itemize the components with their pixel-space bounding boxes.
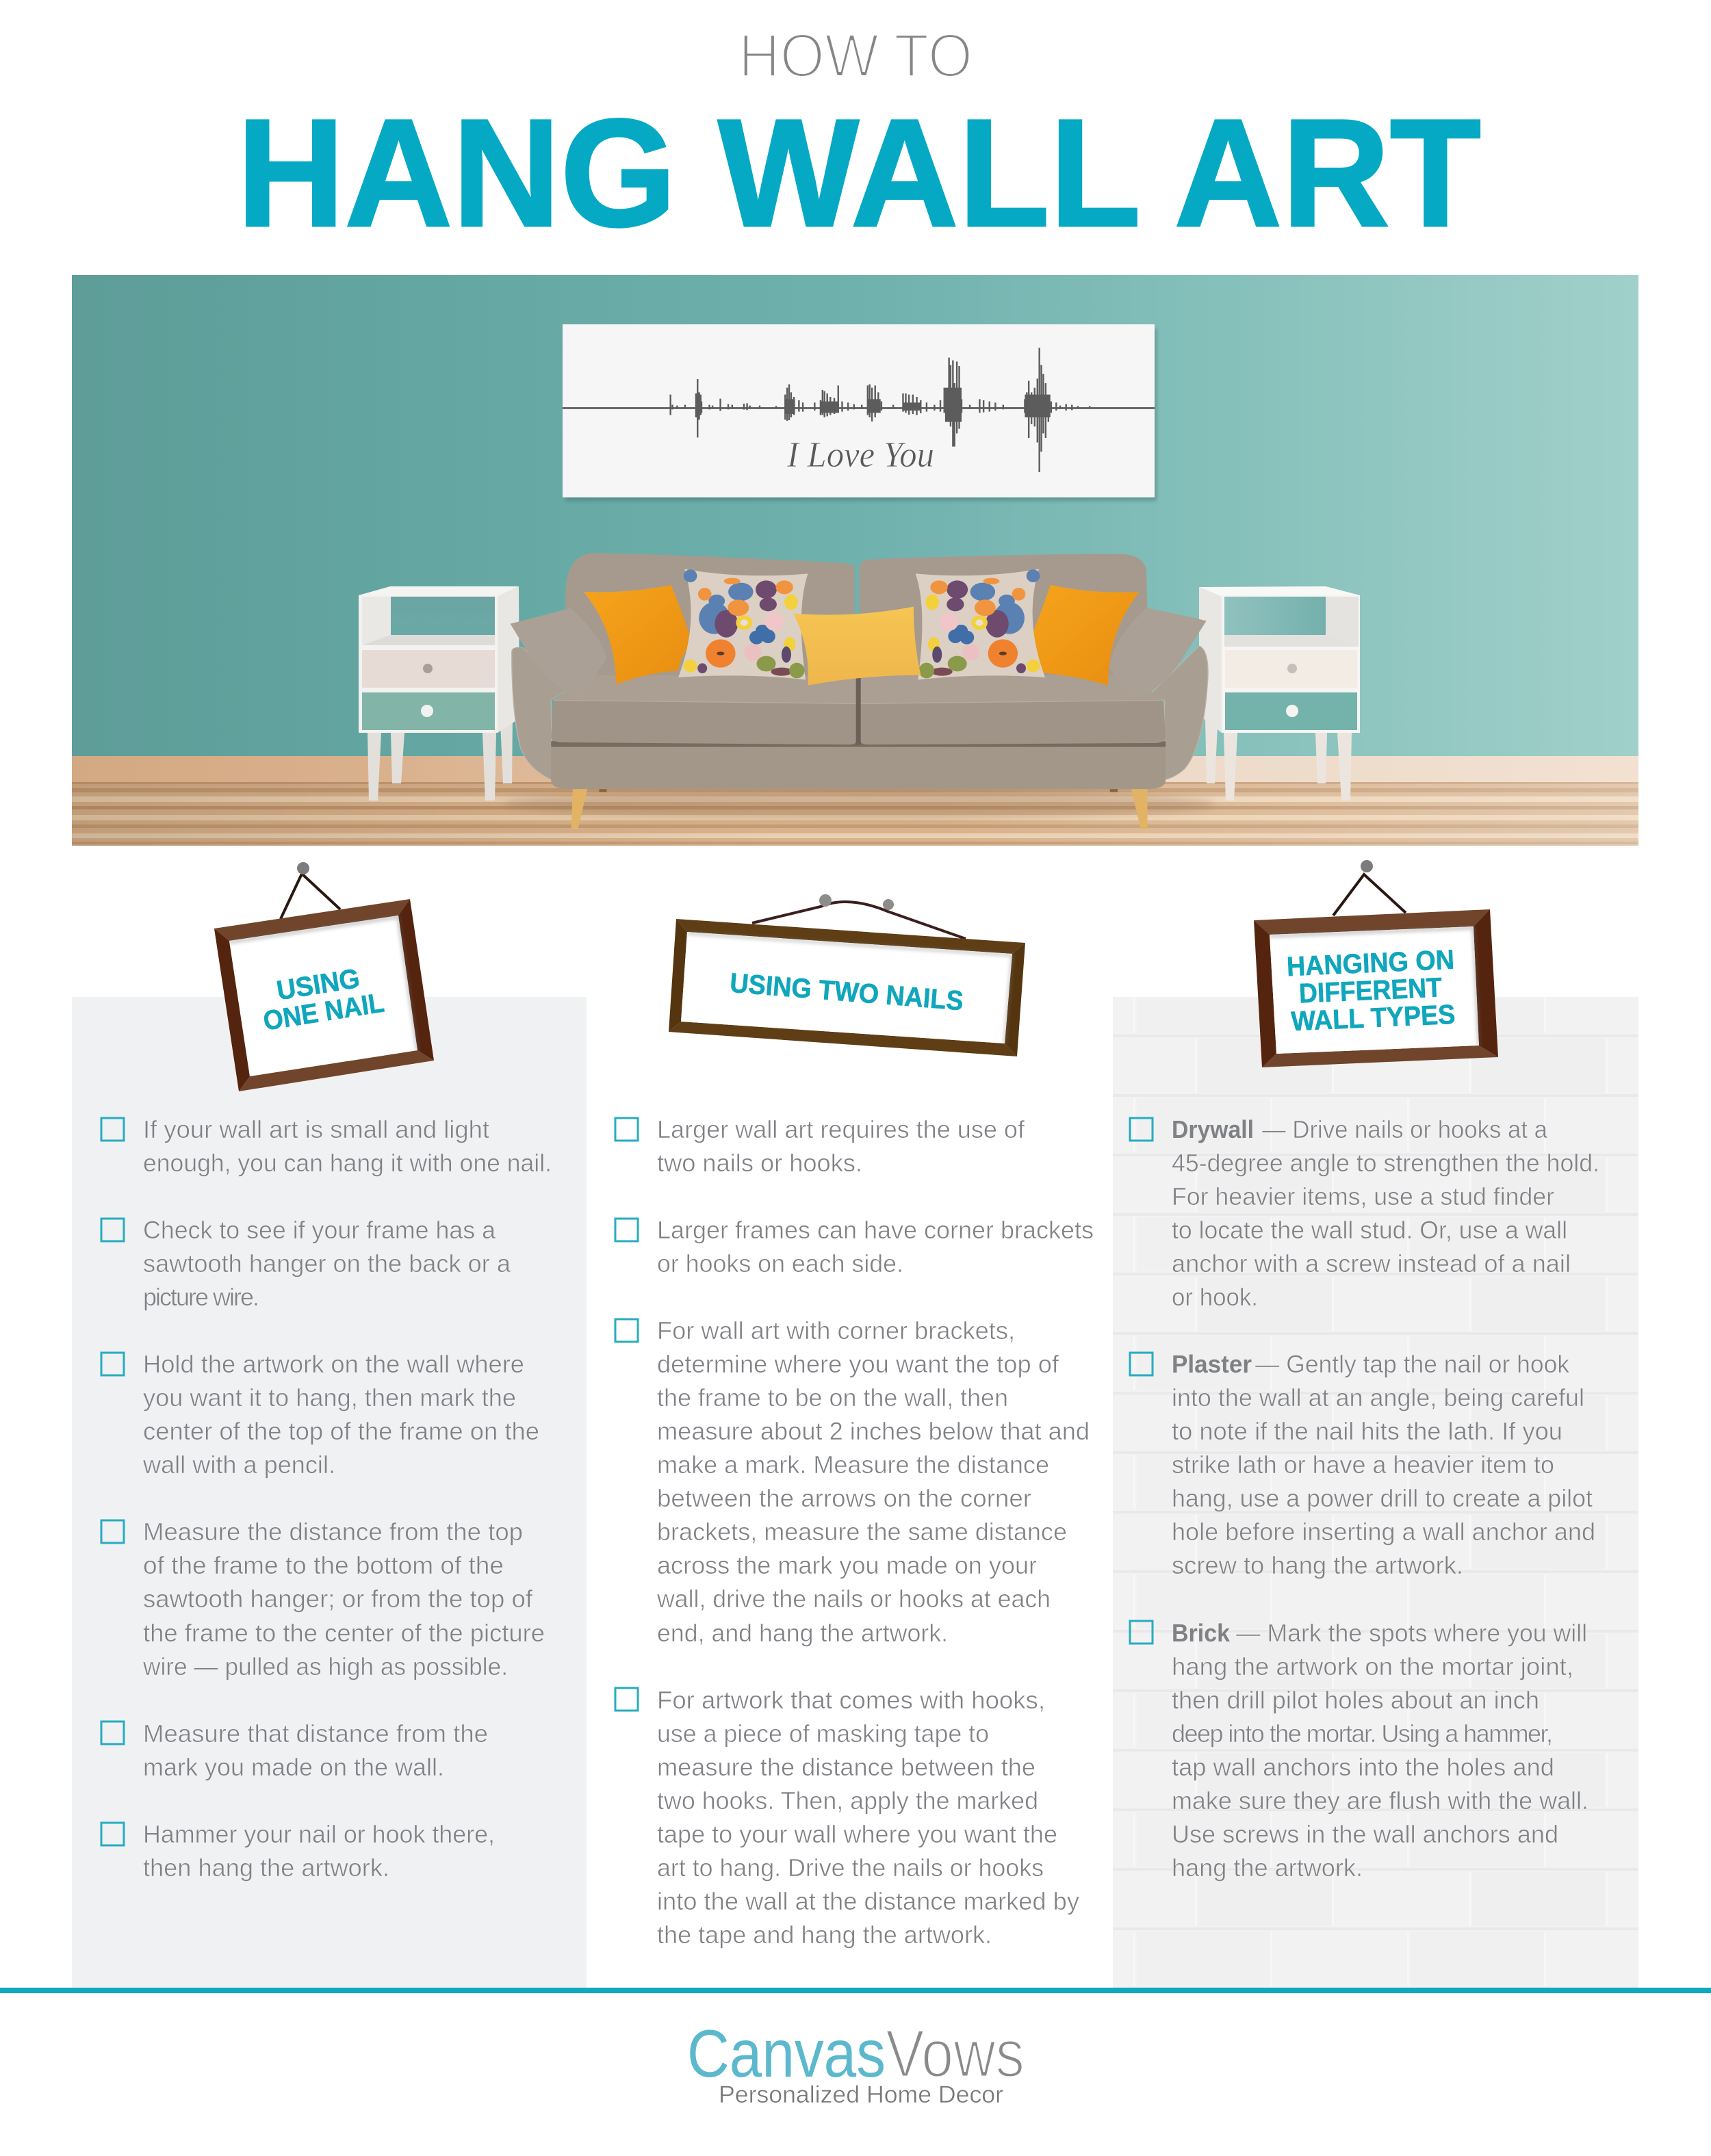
item: corner brackets xyxy=(615,1316,1090,1647)
item: plaster: strike lath or have a heavier item to xyxy=(1172,1451,1554,1479)
column three brick panel xyxy=(1113,997,1638,1988)
item: drywall: to locate the wall stud. Or, use a wall xyxy=(1172,1216,1567,1244)
item: artwork with hooks: into the wall at the distance marked by xyxy=(657,1887,1079,1915)
item: corner brackets: the frame to be on the wall, then xyxy=(657,1384,1008,1412)
item: small and light: enough, you can hang it with one nail. xyxy=(143,1149,552,1177)
item: drywall xyxy=(1130,1115,1599,1311)
item: corner brackets: across the mark you made on your xyxy=(657,1551,1037,1579)
item: corner brackets: wall, drive the nails or hooks at each xyxy=(656,1585,1051,1613)
item: plaster: screw to hang the artwork. xyxy=(1172,1551,1463,1579)
item: measure distance xyxy=(101,1518,545,1680)
item: artwork with hooks xyxy=(615,1686,1079,1949)
logo: Personalized Home Decor xyxy=(719,2081,1003,2108)
sofa legs xyxy=(571,788,1147,829)
item: hanger check xyxy=(101,1216,511,1311)
item: hammer: Hammer your nail or hook there, xyxy=(143,1820,495,1848)
item: plaster: — Gently tap the nail or hook xyxy=(1255,1350,1570,1378)
side table: right xyxy=(1199,586,1360,801)
frame: using two nails xyxy=(669,894,1025,1056)
item: artwork with hooks: tape to your wall where you want the xyxy=(657,1820,1057,1848)
item: corner brackets: measure about 2 inches below that and xyxy=(657,1417,1090,1445)
title: hang wall art: HANG WALL ART xyxy=(237,88,1481,259)
item: artwork with hooks: use a piece of masking tape to xyxy=(657,1719,989,1748)
side table: left xyxy=(359,586,519,801)
column one checklist xyxy=(101,1115,552,1882)
item: hanger check: picture wire. xyxy=(143,1283,259,1311)
hero image: living room scene xyxy=(72,275,1638,846)
item: larger frames xyxy=(615,1216,1094,1277)
divider bar xyxy=(0,1988,1711,1993)
item: drywall: For heavier items, use a stud finder xyxy=(1172,1182,1554,1210)
item: drywall: anchor with a screw instead of a nail xyxy=(1172,1249,1571,1277)
item: mark the wall: you want it to hang, then mark the xyxy=(143,1384,516,1412)
item: measure distance: Measure the distance from the top xyxy=(143,1518,523,1546)
item: measure from mark: mark you made on the wall. xyxy=(143,1753,444,1781)
frame: using one nail xyxy=(214,862,434,1091)
logo xyxy=(687,2016,1025,2108)
item: corner brackets: end, and hang the artwork. xyxy=(657,1619,948,1647)
item: measure distance: sawtooth hanger; or from the top of xyxy=(143,1585,533,1613)
item: larger art: Larger wall art requires the use of xyxy=(657,1115,1025,1143)
item: mark the wall: center of the top of the frame on the xyxy=(143,1417,539,1445)
heading text: HANGING ON xyxy=(1286,945,1455,982)
item: brick: make sure they are flush with the wall. xyxy=(1172,1787,1588,1815)
string and nail xyxy=(1333,860,1406,915)
item: artwork with hooks: the tape and hang the artwork. xyxy=(657,1921,992,1949)
item: corner brackets: determine where you want the top of xyxy=(657,1350,1059,1378)
item: brick: hang the artwork on the mortar joint, xyxy=(1172,1652,1573,1680)
item: artwork with hooks: two hooks. Then, apply the marked xyxy=(657,1787,1038,1815)
frame: hanging on different wall types: DIFFERENT xyxy=(1298,972,1443,1009)
orange pillows xyxy=(584,585,1140,686)
item: hanger check: sawtooth hanger on the back or a xyxy=(143,1249,511,1277)
item: corner brackets: make a mark. Measure the distance xyxy=(657,1451,1049,1479)
item: measure distance: wire — pulled as high as possible. xyxy=(142,1652,508,1680)
floral pillow: left xyxy=(678,569,808,679)
yellow pillow xyxy=(793,607,921,686)
sofa xyxy=(511,553,1208,829)
sofa seat and base xyxy=(551,675,1166,789)
column two checklist xyxy=(615,1115,1094,1949)
item: plaster: Plaster xyxy=(1172,1350,1252,1378)
frame: hanging on different wall types xyxy=(1254,860,1498,1067)
item: artwork with hooks: For artwork that comes with hooks, xyxy=(657,1686,1045,1714)
table legs xyxy=(1205,718,1352,801)
canvas caption: I Love You xyxy=(786,436,934,475)
item: drywall: or hook. xyxy=(1172,1283,1258,1311)
item: hanger check: Check to see if your frame has a xyxy=(143,1216,496,1244)
item: hammer: then hang the artwork. xyxy=(143,1854,389,1882)
item: corner brackets: For wall art with corner brackets, xyxy=(657,1316,1015,1345)
item: brick: — Mark the spots where you will xyxy=(1236,1619,1587,1647)
item: hammer xyxy=(101,1820,495,1882)
item: plaster: hang, use a power drill to create a pilot xyxy=(1172,1484,1593,1512)
item: brick: tap wall anchors into the holes and xyxy=(1172,1753,1554,1781)
item: brick: Use screws in the wall anchors and xyxy=(1172,1820,1558,1848)
wall canvas: soundwave art xyxy=(563,324,1157,501)
item: brick xyxy=(1130,1619,1588,1882)
item: measure distance: of the frame to the bottom of the xyxy=(143,1551,504,1579)
item: plaster: hole before inserting a wall anchor and xyxy=(1172,1518,1595,1546)
item: brick: Brick xyxy=(1172,1619,1231,1647)
item: small and light xyxy=(101,1115,552,1177)
item: corner brackets: between the arrows on the corner xyxy=(657,1484,1031,1512)
item: mark the wall: Hold the artwork on the wall where xyxy=(143,1350,524,1378)
column one panel xyxy=(72,997,587,1988)
item: corner brackets: brackets, measure the same distance xyxy=(657,1518,1067,1546)
logo: Vows xyxy=(886,2016,1025,2091)
sofa back xyxy=(565,553,1149,686)
sofa arms xyxy=(512,646,1208,780)
item: artwork with hooks: measure the distance between the xyxy=(657,1753,1035,1781)
item: drywall: 45-degree angle to strengthen the hold. xyxy=(1172,1149,1599,1177)
heading text: USING xyxy=(274,963,362,1006)
string and nail xyxy=(281,862,340,919)
logo: Canvas xyxy=(687,2016,886,2091)
frame: using one nail: ONE NAIL xyxy=(261,988,386,1037)
drawers xyxy=(362,650,495,730)
item: larger art xyxy=(615,1115,1025,1177)
item: artwork with hooks: art to hang. Drive the nails or hooks xyxy=(657,1854,1044,1882)
item: measure from mark: Measure that distance from the xyxy=(143,1719,488,1748)
item: plaster: into the wall at an angle, being careful xyxy=(1172,1384,1584,1412)
item: brick: deep into the mortar. Using a hammer, xyxy=(1172,1719,1553,1748)
item: mark the wall xyxy=(101,1350,539,1479)
item: brick: then drill pilot holes about an inch xyxy=(1172,1686,1539,1714)
item: plaster xyxy=(1130,1350,1595,1579)
item: drywall: — Drive nails or hooks at a xyxy=(1262,1115,1548,1143)
item: measure from mark xyxy=(101,1719,488,1781)
frame: hanging on different wall types: WALL TYPES xyxy=(1291,1000,1456,1037)
item: plaster: to note if the nail hits the lath. If you xyxy=(1172,1417,1562,1445)
item: mark the wall: wall with a pencil. xyxy=(142,1451,335,1479)
drawers xyxy=(1225,650,1357,730)
item: measure distance: the frame to the center of the picture xyxy=(143,1619,545,1647)
item: larger frames: or hooks on each side. xyxy=(657,1249,903,1277)
item: brick: hang the artwork. xyxy=(1172,1854,1363,1882)
title: how to: HOW TO xyxy=(738,22,973,90)
item: larger frames: Larger frames can have corner brackets xyxy=(657,1216,1094,1244)
floral pillow: right xyxy=(916,569,1045,679)
heading text: USING TWO NAILS xyxy=(729,968,964,1016)
item: drywall: Drywall xyxy=(1172,1115,1254,1143)
soundwave xyxy=(671,348,1090,472)
item: small and light: If your wall art is small and light xyxy=(143,1115,489,1143)
table legs xyxy=(368,715,513,801)
string and nails xyxy=(752,894,966,939)
column three checklist xyxy=(1130,1115,1599,1882)
item: larger art: two nails or hooks. xyxy=(657,1149,862,1177)
side pillows xyxy=(511,608,1207,699)
